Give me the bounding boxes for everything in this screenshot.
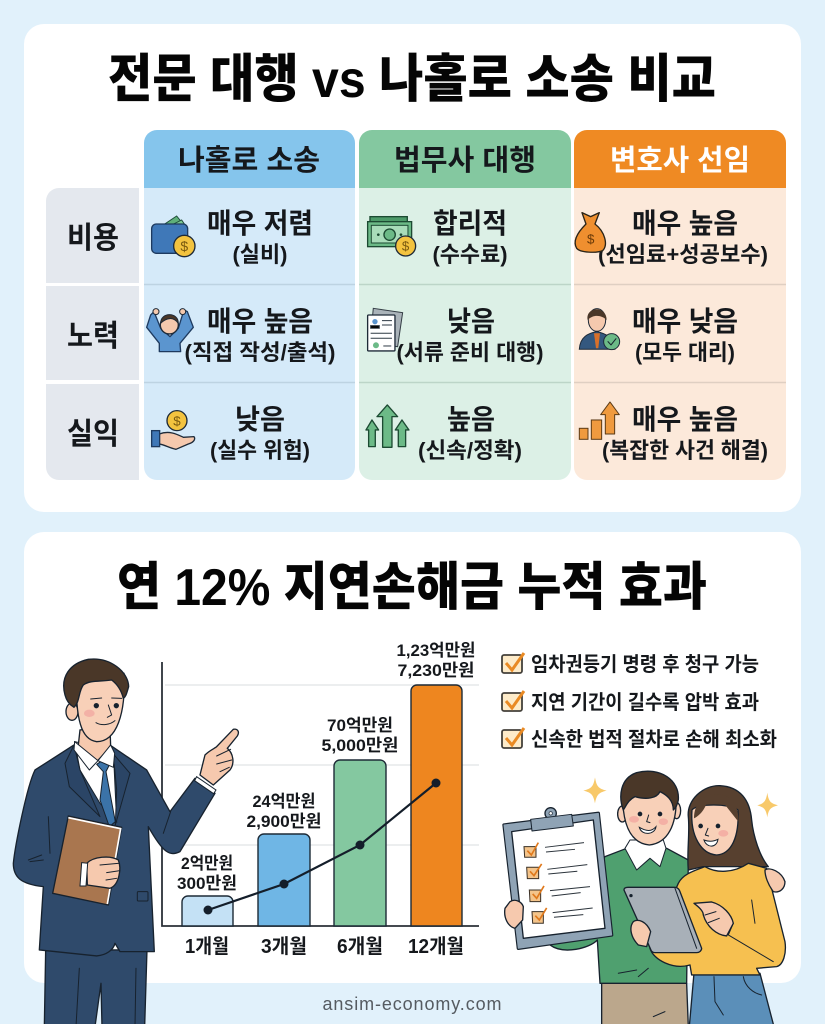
axis labels: 1개월 [185,935,229,958]
header: self-litigation: 나홀로 소송 [178,144,320,177]
cell: results, self-litigation: 낮음 [235,404,285,435]
header: legal scrivener: 법무사 대행 [394,144,536,177]
check item 1: 임차권등기 명령 후 청구 가능 [531,653,759,676]
cell: effort, lawyer: (모두 대리) [635,340,735,365]
cell: effort, lawyer [632,306,738,365]
illustration: couple with checklist [504,771,785,1024]
cell: results, self-litigation [210,404,310,463]
icon: documents [368,308,403,351]
axis labels: 6개월 [337,935,383,958]
header: lawyer: 변호사 선임 [610,144,750,177]
icon: agent with check [579,309,620,350]
cell: results, lawyer [602,404,768,463]
value labels [177,641,476,893]
cell: results, lawyer: (복잡한 사건 해결) [602,438,768,463]
cell: cost, scrivener: 합리적 [433,208,507,239]
icon: hand with coin: $ [173,413,181,428]
cell: results, lawyer: 매우 높음 [632,404,738,435]
value labels: 7,230만원 [398,661,474,680]
value labels: 2억만원 [181,854,233,873]
column: lawyer [574,130,786,480]
axis labels: 3개월 [261,935,307,958]
cell: effort, scrivener: (서류 준비 대행) [396,340,544,365]
bar: 6 months [334,760,386,926]
bar: 12 months [411,685,462,926]
cell: cost, scrivener [432,208,508,267]
cell: effort, self-litigation: 매우 높음 [207,306,313,337]
value labels: 2,900만원 [246,812,322,831]
value labels: 70억만원 [327,716,393,735]
check item 3: 신속한 법적 절차로 손해 최소화 [531,728,777,751]
footer: source website: ansim-economy.com [322,994,502,1014]
icon: stressed person [147,309,193,352]
checklist [502,653,777,751]
icon: money bag [575,213,605,252]
column: self-litigation [144,130,355,480]
icon: wallet with coin [152,216,195,257]
row labels [46,188,139,480]
line: cumulative trend [204,778,440,914]
value labels: 300만원 [177,874,237,893]
cell: cost, self-litigation: 매우 저렴 [207,208,313,239]
cell: results, scrivener: 높음 [447,404,495,435]
icon: green up arrows [366,405,409,447]
check item 2: 지연 기간이 길수록 압박 효과 [531,691,759,714]
cell: effort, scrivener [396,306,544,365]
cell: cost, self-litigation [207,208,313,267]
value labels: 24억만원 [252,792,316,811]
title: comparison: 전문 대행 vs 나홀로 소송 비교 [108,51,716,109]
illustration: man in suit pointing [13,659,238,1024]
axis labels: 12개월 [408,935,464,958]
panel: comparison table [24,24,801,512]
row labels: 실익 [67,418,119,451]
clipboard check rows [524,843,593,923]
cell: cost, lawyer: 매우 높음 [632,208,738,239]
icon: cash with coin: $ [402,239,410,254]
axis labels [185,935,464,958]
cell: effort, self-litigation [184,306,336,365]
bar chart [162,641,479,958]
icon: money bag: $ [587,231,595,246]
bar: 3 months [258,834,310,926]
cell: cost, self-litigation: (실비) [232,242,288,267]
title: delay damages: 연 12% 지연손해금 누적 효과 [117,559,707,617]
cell: effort, lawyer: 매우 낮음 [632,306,738,337]
bar: 1 month [182,896,233,926]
panel: delay damages [24,532,801,983]
sparkles [583,777,778,817]
icon: hand with coin [152,411,195,449]
cell: results, scrivener: (신속/정확) [418,438,522,463]
cell: effort, scrivener: 낮음 [447,306,495,337]
cell: effort, self-litigation: (직접 작성/출석) [184,340,336,365]
icon: bars with arrow [579,402,619,439]
cell: cost, lawyer [598,208,768,267]
icon: wallet with coin: $ [180,238,188,254]
cell: cost, scrivener: (수수료) [432,242,508,267]
row labels: 비용 [67,222,119,255]
cell: results, scrivener [418,404,522,463]
icon: cash with coin [368,217,416,256]
value labels: 5,000만원 [322,736,398,755]
value labels: 1,23억만원 [396,641,476,660]
row labels: 노력 [67,320,119,353]
cell: results, self-litigation: (실수 위험) [210,438,310,463]
column: legal scrivener [359,130,571,480]
cell: cost, lawyer: (선임료+성공보수) [598,242,768,267]
